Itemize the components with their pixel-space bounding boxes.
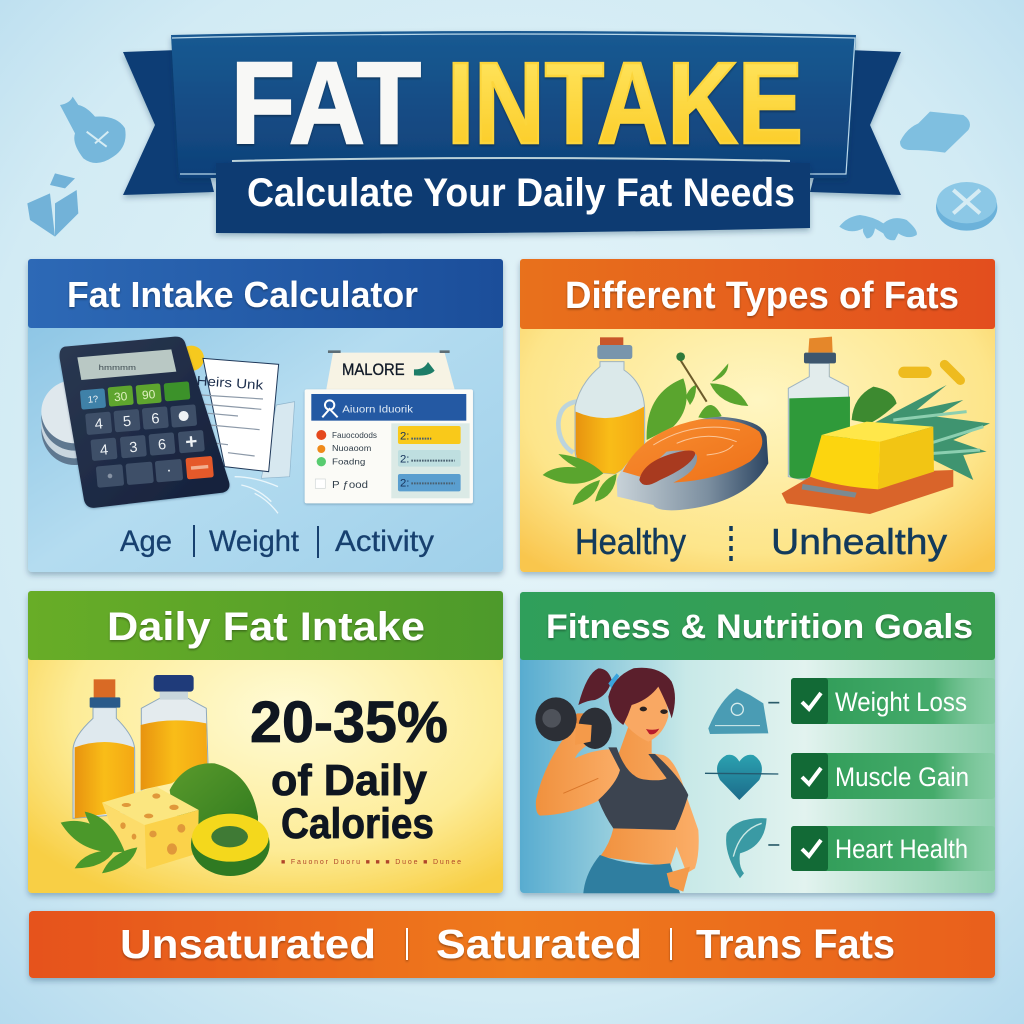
labels: age weight activity: Age [120,525,172,558]
avocado whole [170,763,258,840]
goal: heart health [791,826,995,871]
icon: leaf [726,818,779,878]
form card: Foadng [332,457,366,467]
illustration: calculator scene [41,337,473,513]
calculator: 90 [141,387,156,402]
note sheet: Heirs Unk [196,373,264,393]
greens [852,385,990,480]
heading: calculator: Fat Intake Calculator [67,274,418,315]
leaves [543,352,748,505]
panel header: calculator [28,259,503,328]
title banner [123,31,901,233]
form card: 2: [400,478,409,490]
raised arm [536,724,623,816]
tank top [598,747,688,830]
subtitle ribbon [216,160,810,233]
banner right tail [810,50,901,195]
labels: healthy unhealthy: Unhealthy [771,521,947,562]
labels: age weight activity [120,525,434,558]
form card: 2: [400,430,409,442]
small oil bottle [73,679,135,818]
leggings [583,855,680,893]
icon: scale [708,688,779,734]
butter [810,422,934,489]
labels: healthy unhealthy: Healthy [575,521,686,562]
panel: calculator [28,259,503,572]
decorative icon: plate [936,182,997,231]
title: FAT [231,38,421,168]
form card: Nuoaoom [332,443,371,453]
woman with dumbbell [535,668,699,893]
calculator [60,337,229,508]
calculator: 5 [122,414,132,430]
panel: types of fats [520,259,995,572]
hand [575,723,592,745]
tag MALORE [326,352,455,389]
decorative icon: swirl [839,215,917,240]
form card: Fauocodods [332,430,377,440]
banner main [171,31,856,178]
calculator: 1? [87,394,99,405]
labels: age weight activity: Weight [209,525,300,558]
lemon [179,346,204,371]
goal: weight loss: Weight Loss [835,687,967,717]
hair [608,668,675,725]
fine print: ■ Fauonor Duoru ■ ■ ■ Duoe ■ Dunee [281,859,461,866]
cheese [102,787,199,869]
panel: daily fat intake [28,591,503,893]
panel header: daily [28,591,503,660]
banner left tail [123,50,214,195]
feather [235,477,278,513]
title banner: INTAKE [447,38,803,168]
tag MALORE: MALORE [342,360,405,379]
calculator: hmmmm [99,363,136,372]
fat type labels: Saturated [436,921,642,967]
calculator: 30 [113,389,128,404]
labels: healthy unhealthy [575,521,947,562]
ponytail [578,668,612,705]
coins [41,380,108,465]
bottom bar [29,911,995,978]
dumbbell [535,697,612,749]
salmon [617,417,768,510]
fat type labels [120,921,895,967]
capsules [898,358,967,387]
decorative icon: butter [900,112,970,153]
face [623,686,668,742]
green oil bottle [788,337,850,480]
labels: age weight activity: Activity [335,525,434,558]
stat: 20-35% of daily calories: of Daily [271,756,428,805]
form card [305,389,473,503]
heading: goals: Fitness & Nutrition Goals [546,608,973,646]
large oil bottle [141,675,208,790]
calculator: 3 [129,440,138,456]
stat: 20-35% of daily calories [250,690,448,848]
panel header: types [520,259,995,329]
leaves [61,812,137,873]
avocado half [191,813,270,876]
stat: 20-35% of daily calories: Calories [281,800,434,848]
illustration: fats scene [543,337,990,514]
calculator: 4 [94,416,104,433]
heading: types: Different Types of Fats [565,275,959,317]
calculator: 6 [151,411,160,428]
body skin [598,727,699,873]
form card: Aiuorn Iduorik [342,404,413,415]
illustration: woman and goal icons [535,668,779,893]
calculator: + [184,430,198,454]
calculator: 6 [157,437,167,454]
heading: daily: Daily Fat Intake [107,605,425,649]
decorative icon: flask [60,97,126,163]
panel header: goals [520,592,995,660]
hand on hip [667,867,690,892]
illustration: foods scene [61,675,270,876]
goal: weight loss [791,678,995,724]
panel: goals [520,592,995,893]
form card: P ƒood [332,480,368,491]
note sheet [196,358,279,472]
goal: heart health: Heart Health [835,834,968,864]
cutting board [782,470,953,514]
goal: muscle gain: Muscle Gain [835,762,969,792]
goal: muscle gain [791,753,995,799]
stat: 20-35% of daily calories: 20-35% [250,690,448,755]
icon: heart [705,755,778,800]
calculator: 4 [99,442,109,459]
form card: 2: [400,454,409,466]
decorative icon: box [27,173,78,237]
olive oil bottle [558,337,645,474]
subtitle: Calculate Your Daily Fat Needs [247,171,795,215]
back sheet [261,402,295,478]
fat type labels: Trans Fats [696,921,895,967]
fat type labels: Unsaturated [120,921,376,967]
